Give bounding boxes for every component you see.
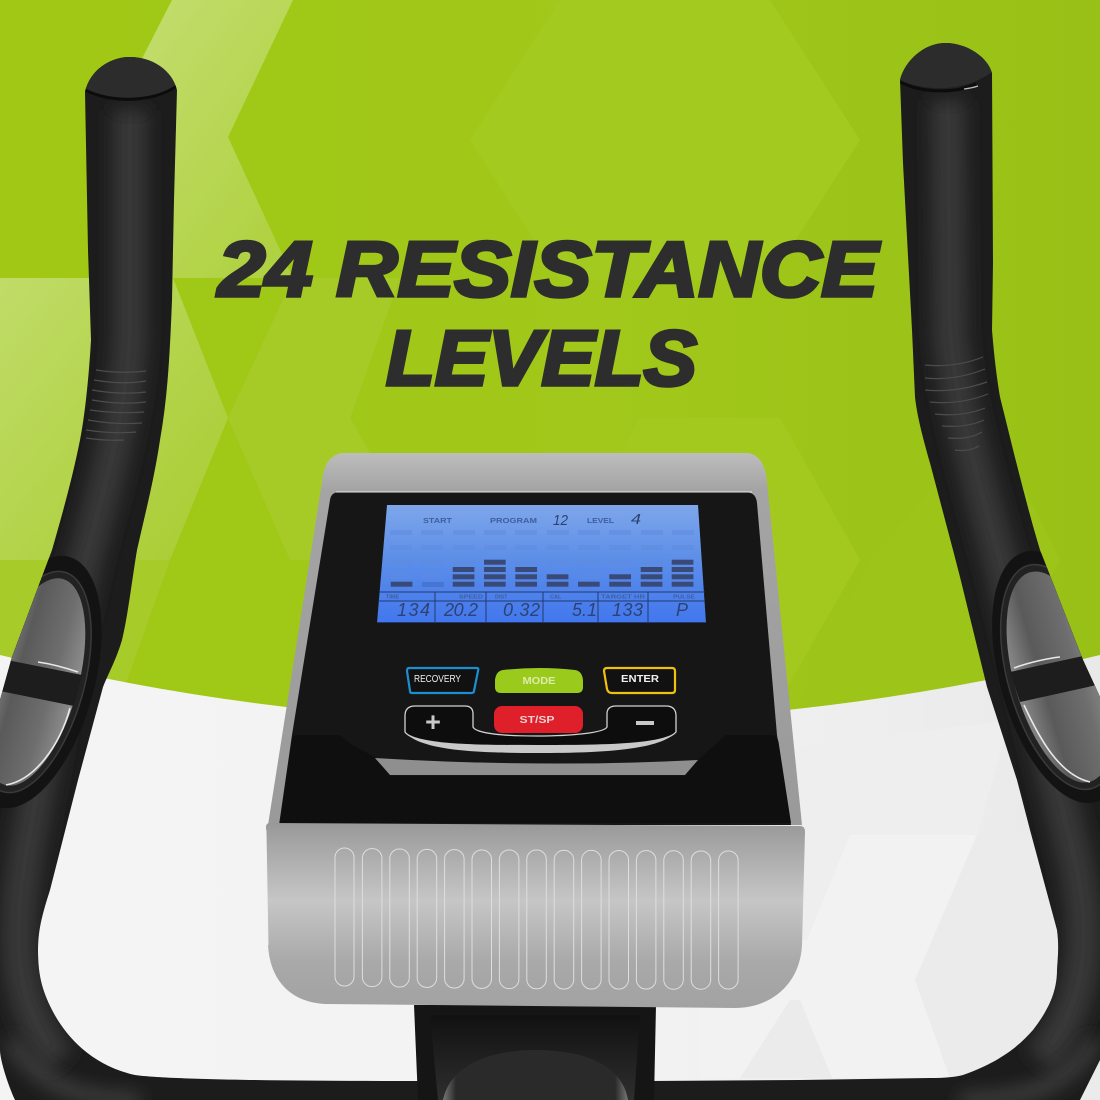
minus symbol	[636, 721, 654, 725]
LCD table headers	[386, 594, 695, 600]
left grip sensor buttons	[0, 556, 102, 808]
silver strip under buttons	[375, 758, 698, 775]
LCD table values	[397, 600, 688, 620]
LCD top labels: START	[423, 516, 452, 525]
right handlebar	[650, 43, 1100, 1100]
title line 1: 24 RESISTANCE	[216, 225, 880, 313]
LCD table headers: CAL	[550, 594, 562, 600]
LCD table values: 134	[397, 600, 430, 620]
LCD table headers: PULSE	[673, 594, 695, 600]
LCD table headers: TIME	[386, 594, 399, 600]
console housing	[268, 453, 802, 825]
LCD table values: 0.32	[503, 600, 540, 620]
dark centre band	[0, 658, 82, 706]
LCD program and level values	[553, 511, 641, 529]
LCD data table lines	[377, 592, 706, 623]
plus symbol: +	[425, 707, 441, 737]
LCD resistance bar chart	[391, 560, 693, 587]
button: start stop: ST/SP	[520, 714, 554, 726]
dark centre band	[1010, 655, 1100, 702]
silver ribbed console base	[266, 823, 805, 1008]
right grip sensor buttons	[992, 551, 1100, 803]
button: recovery: RECOVERY	[414, 674, 461, 685]
title line 2: LEVELS	[386, 314, 697, 402]
black control panel	[279, 492, 791, 825]
button: mode: MODE	[522, 676, 556, 687]
black tray	[280, 735, 791, 823]
background: white curved lower panel	[0, 655, 1100, 1100]
button: start stop	[494, 706, 583, 733]
LCD program and level values: 12	[553, 512, 569, 529]
button: enter	[604, 668, 675, 693]
LCD table headers: SPEED	[459, 594, 483, 600]
LCD program and level values: 4	[631, 511, 641, 528]
LCD table headers: DIST	[495, 594, 508, 600]
button: recovery	[407, 668, 478, 693]
ribs	[335, 848, 738, 989]
LCD table values: 20.2	[443, 600, 478, 620]
metal highlights	[6, 662, 78, 785]
left handlebar	[0, 57, 420, 1100]
panel top highlight	[336, 491, 752, 493]
metal highlights	[1014, 657, 1090, 782]
LCD top labels: PROGRAM	[490, 516, 537, 525]
metal pad	[0, 578, 86, 786]
button: mode	[495, 668, 583, 693]
LCD top labels	[423, 516, 614, 525]
plus and minus key panel	[405, 706, 676, 753]
console stem	[414, 1005, 656, 1100]
LCD table values: 5.1	[572, 600, 597, 620]
button: enter: ENTER	[621, 673, 659, 685]
metal pad	[1006, 572, 1100, 782]
LCD table values: P	[676, 600, 688, 620]
LCD table headers: TARGET HR	[601, 594, 645, 600]
faint LCD bar segments	[390, 530, 694, 587]
LCD top labels: LEVEL	[587, 516, 614, 525]
title	[216, 225, 880, 402]
LCD table values: 133	[612, 600, 643, 620]
LCD screen	[377, 505, 706, 623]
lower silver crescent	[405, 732, 676, 753]
